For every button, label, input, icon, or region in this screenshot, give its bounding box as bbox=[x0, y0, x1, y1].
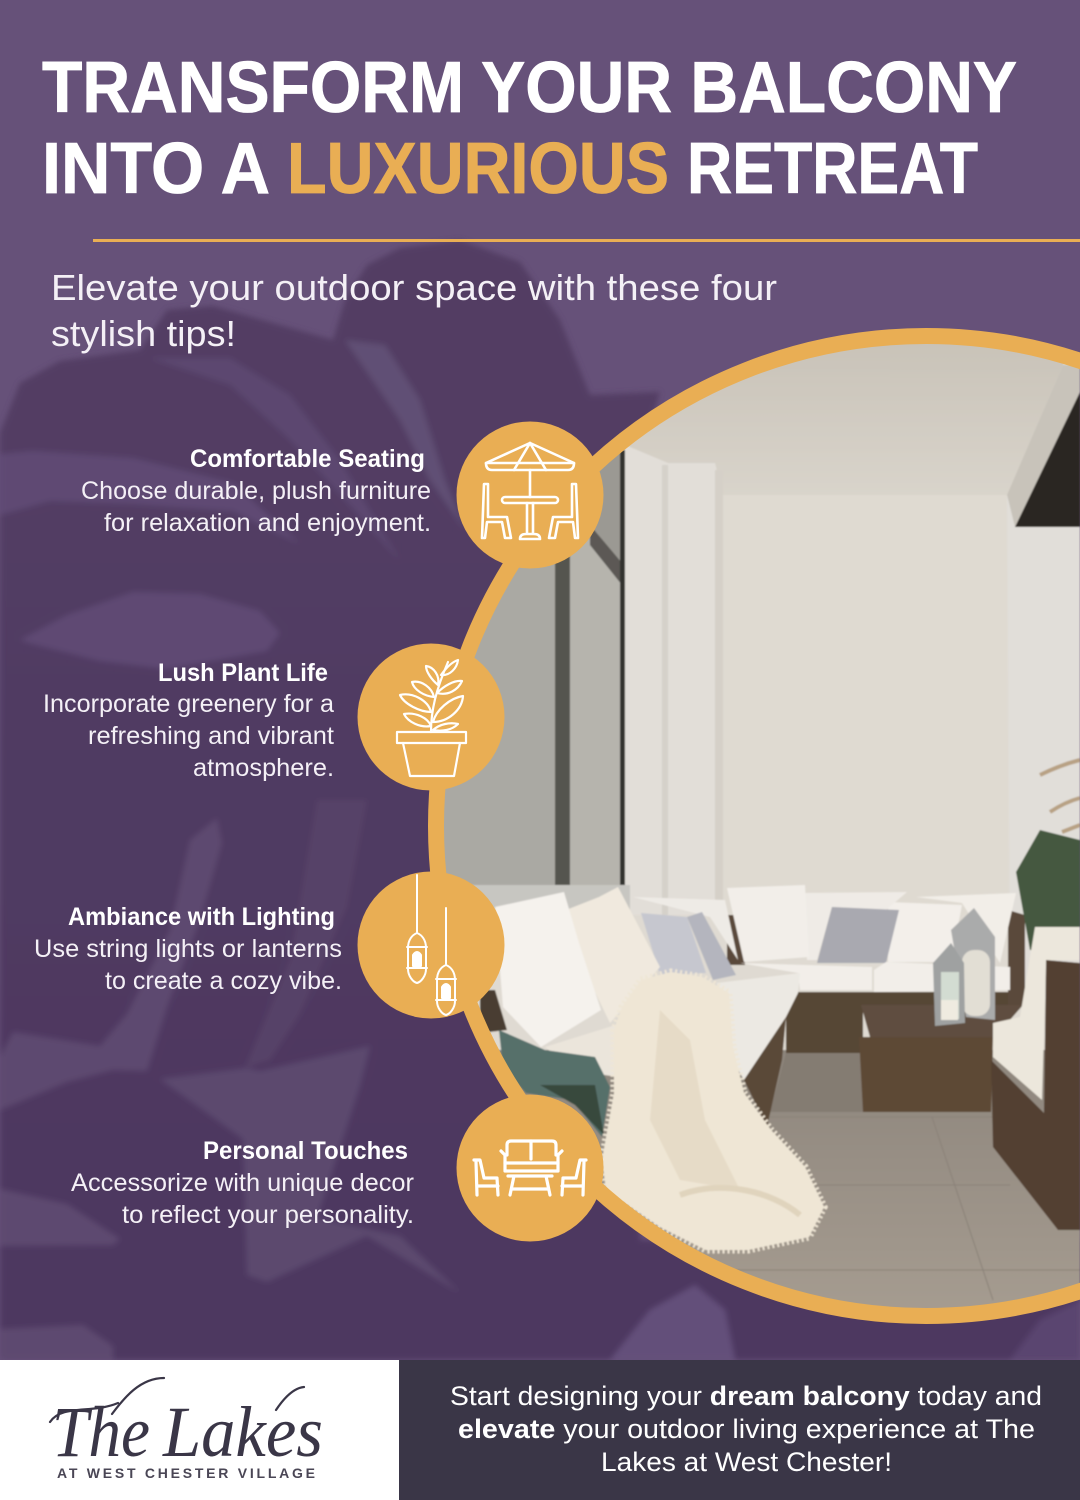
text: lush plant life: Incorporate greenery for a bbox=[43, 690, 334, 718]
text: lush plant life: Lush Plant Life bbox=[158, 659, 328, 687]
call to action panel bbox=[399, 1360, 1080, 1500]
text: ambiance with lighting: Ambiance with Lighting bbox=[68, 903, 335, 931]
side cushions bbox=[633, 897, 738, 960]
text: personal touches: to reflect your personality. bbox=[122, 1201, 414, 1229]
wicker under back sofa bbox=[786, 992, 1025, 1053]
text: personal touches bbox=[71, 1137, 414, 1229]
title: LUXURIOUS bbox=[287, 129, 669, 209]
text: comfortable seating: Choose durable, plush furniture bbox=[81, 477, 431, 505]
throw blanket bbox=[602, 972, 824, 1250]
right armchair bbox=[991, 960, 1080, 1230]
subtitle: Elevate your outdoor space with these four bbox=[51, 267, 777, 308]
text: ambiance with lighting: Use string lights or lanterns bbox=[34, 935, 342, 963]
text: comfortable seating bbox=[81, 445, 431, 537]
text: comfortable seating: for relaxation and enjoyment. bbox=[104, 509, 431, 537]
title bbox=[42, 48, 1017, 209]
call to action panel: Start designing your dream balcony today and bbox=[450, 1381, 1042, 1411]
icon: outdoor furniture set bbox=[456, 1094, 604, 1242]
icon: patio table and umbrella bbox=[456, 422, 604, 568]
logo panel: Lakes bbox=[162, 1392, 323, 1472]
beam edge and right wall bbox=[1007, 365, 1080, 527]
glass door bbox=[444, 564, 556, 886]
call to action panel: Lakes at West Chester! bbox=[601, 1447, 892, 1477]
lanterns bbox=[951, 908, 995, 1020]
icon: potted plant bbox=[358, 644, 504, 790]
text: lush plant life: refreshing and vibrant bbox=[88, 722, 334, 750]
text: personal touches: Personal Touches bbox=[203, 1137, 408, 1165]
title: RETREAT bbox=[687, 129, 978, 209]
title: TRANSFORM YOUR BALCONY bbox=[42, 48, 1017, 128]
grasses top right bbox=[1040, 760, 1080, 832]
logo panel bbox=[0, 1360, 399, 1500]
subtitle bbox=[51, 267, 777, 354]
text: ambiance with lighting bbox=[34, 903, 342, 995]
grass bbox=[499, 1030, 610, 1137]
tip 1: comfortable seating bbox=[81, 422, 604, 568]
gold ring bbox=[436, 336, 1080, 1316]
icon: hanging lanterns bbox=[358, 872, 504, 1018]
floor bbox=[499, 1049, 1080, 1308]
coffee table bbox=[861, 1005, 1023, 1037]
text: lush plant life: atmosphere. bbox=[193, 754, 334, 782]
logo panel: The bbox=[52, 1392, 150, 1472]
text: comfortable seating: Comfortable Seating bbox=[190, 445, 425, 473]
left seat bbox=[717, 973, 800, 1080]
logo panel: AT WEST CHESTER VILLAGE bbox=[57, 1465, 315, 1481]
call to action panel: elevate your outdoor living experience at The bbox=[458, 1414, 1035, 1444]
tip 4: personal touches bbox=[71, 1094, 604, 1242]
pillar bbox=[625, 445, 723, 915]
title: INTO A bbox=[42, 129, 270, 209]
text: personal touches: Accessorize with unique decor bbox=[71, 1169, 414, 1197]
tip 3: ambiance with lighting bbox=[34, 872, 504, 1018]
seat cushions bbox=[740, 963, 872, 990]
photo: balcony lounge in circle bbox=[430, 320, 1080, 1340]
back wall bbox=[723, 495, 1007, 915]
ceiling bbox=[630, 344, 1064, 482]
dark beam bbox=[1015, 392, 1080, 527]
plant right bbox=[1016, 830, 1080, 950]
tip 2: lush plant life bbox=[43, 644, 504, 790]
text: ambiance with lighting: to create a cozy vibe. bbox=[105, 967, 342, 995]
back cushions bbox=[916, 893, 1016, 963]
divider line bbox=[93, 239, 1080, 242]
text: lush plant life bbox=[43, 659, 334, 782]
shadow under sofa bbox=[770, 1053, 863, 1112]
subtitle: stylish tips! bbox=[51, 313, 236, 354]
